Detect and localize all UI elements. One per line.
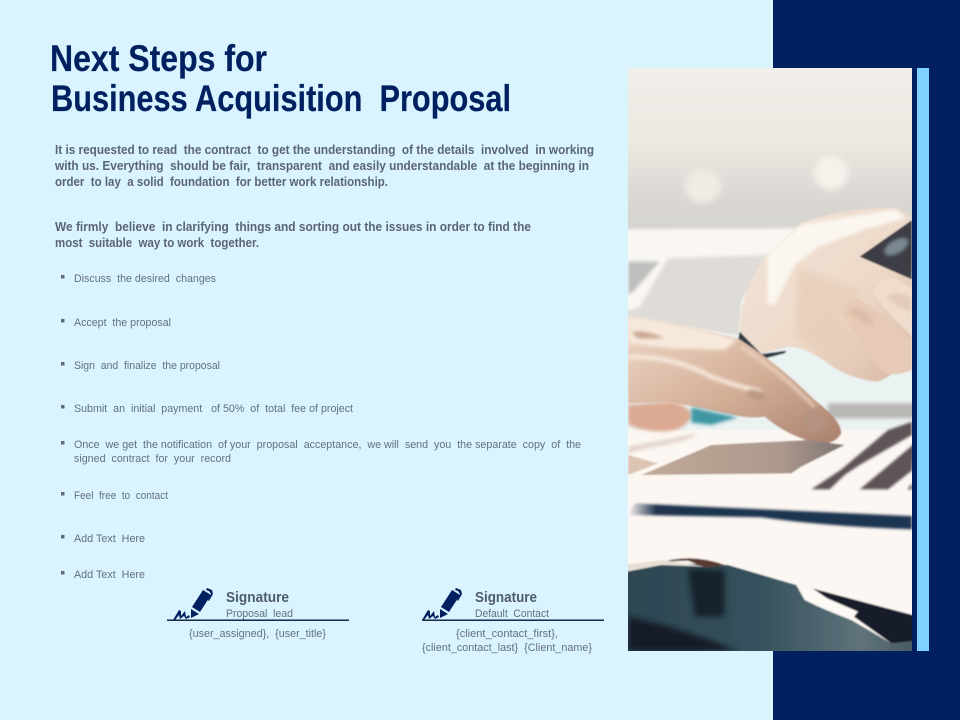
- title: [50, 38, 511, 119]
- title: Next Steps for: [50, 38, 267, 79]
- second paragraph: [55, 219, 531, 250]
- signature block: default contact: [422, 588, 604, 654]
- next steps bullet list: Feel free to contact: [74, 490, 168, 502]
- intro paragraph: order to lay a solid foundation for better work relationship.: [55, 174, 388, 189]
- signature block: default contact: {client_contact_first},: [456, 628, 558, 640]
- next steps bullet list: signed contract for your record: [74, 453, 231, 465]
- title: Business Acquisition Proposal: [51, 78, 511, 119]
- second paragraph: most suitable way to work together.: [55, 235, 259, 250]
- signature block: default contact: {client_contact_last} {Client_name}: [422, 642, 592, 654]
- next steps bullet list: Once we get the notification of your proposal acceptance, we will send you the separate copy of the: [74, 439, 581, 451]
- signature block: proposal lead: [167, 588, 349, 640]
- next steps bullet list: Submit an initial payment of 50% of total fee of project: [74, 403, 353, 415]
- intro paragraph: It is requested to read the contract to get the understanding of the details involved in working: [55, 142, 594, 157]
- navy side panel: [773, 0, 960, 720]
- signature block: default contact: Signature: [475, 590, 537, 606]
- second paragraph: We firmly believe in clarifying things and sorting out the issues in order to find the: [55, 219, 531, 234]
- next steps bullet list: Add Text Here: [74, 533, 145, 545]
- signature block: proposal lead: {user_assigned}, {user_title}: [189, 628, 326, 640]
- next steps bullet list: Discuss the desired changes: [74, 273, 216, 285]
- photo: hands using laptop and credit card: [620, 60, 921, 660]
- icon: signing pen: [422, 588, 462, 620]
- intro paragraph: [54, 142, 594, 189]
- next steps bullet list: Sign and finalize the proposal: [74, 360, 220, 372]
- signature block: default contact: Default Contact: [475, 608, 549, 620]
- intro paragraph: with us. Everything should be fair, transparent and easily understandable at the beginning in: [54, 158, 589, 173]
- signature block: proposal lead: Proposal lead: [226, 608, 293, 620]
- signature block: proposal lead: Signature: [226, 590, 289, 606]
- light blue accent bar: [917, 68, 929, 651]
- next steps bullet list: Add Text Here: [74, 569, 145, 581]
- next steps bullet list: [61, 273, 581, 581]
- icon: signing pen: [173, 588, 213, 620]
- next steps bullet list: Accept the proposal: [74, 317, 171, 329]
